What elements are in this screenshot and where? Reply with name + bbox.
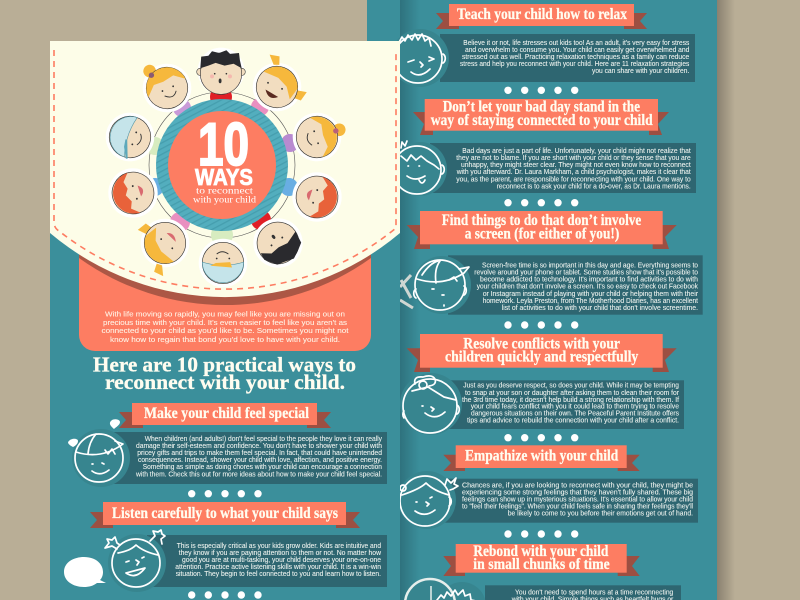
section: screen free: or Instagram instead of playing with your child or helping them with their xyxy=(483,290,699,298)
section: bad day: way of staying connected to your child xyxy=(431,112,653,129)
dots divider xyxy=(188,490,262,497)
section: empathize: Chances are, if you are looking to reconnect with your child, they might be xyxy=(462,481,693,489)
section: resolve conflicts: Just as you deserve respect, so does your child. While it may be tempting xyxy=(463,382,679,390)
section: teach your child how to relax: stress and help you reconnect with your child. Here are 11 relaxation strategies xyxy=(460,60,690,68)
section: resolve conflicts: Resolve conflicts with your xyxy=(463,335,620,352)
badge: 10 ways xyxy=(156,99,288,231)
section: screen free: become addicted to technology. It's important to find activities to do with xyxy=(480,276,698,284)
section: listen carefully xyxy=(90,502,387,587)
panel: intro salmon box xyxy=(79,240,371,351)
dots divider xyxy=(504,321,578,329)
kid: bottom left, yellow pigtail xyxy=(124,206,199,281)
kid: bottom, blue cap xyxy=(199,239,247,287)
heading: practical ways: reconnect with your child. xyxy=(105,370,345,394)
section: bad day: unhappy, they might steer clear. They might not even know how to reconnect xyxy=(461,161,691,169)
illustration: ring of children xyxy=(99,48,353,287)
section: resolve conflicts: tips and advice to rebuild the connection with your child after a conflict. xyxy=(467,417,679,425)
right page shadow xyxy=(717,0,735,600)
section: teach your child how to relax xyxy=(436,4,695,82)
badge: 10 ways: with your child xyxy=(193,195,257,205)
panel: intro salmon box: With life moving so rapidly, you may feel like you are missing out on xyxy=(105,310,345,318)
section: teach your child how to relax: and overwhelm to consume you. Your child can easily get overwhelmed and xyxy=(465,46,689,54)
panel: cream header xyxy=(50,41,400,297)
section: screen free: homework. Leyla Preston, from The Motherhood Diaries, has an excellent xyxy=(483,297,698,305)
section: bad day: with you afterward. Dr. Laura Markham, a child psychologist, makes it clear that xyxy=(456,168,691,176)
section: screen free: Find things to do that don’t involve xyxy=(442,212,641,229)
icon: smiling girl with pigtail xyxy=(398,471,458,529)
icon: girl with top knot xyxy=(400,373,462,435)
panel: right page xyxy=(367,0,717,600)
section: empathize: feelings can show up in mysterious situations. It's essential to allow your child xyxy=(462,495,693,503)
icon: girl with pigtails and speech bubble xyxy=(64,530,166,592)
section: listen carefully: good you are at multi-tasking, your child deserves your one-on-one xyxy=(182,556,381,564)
icon: boy with cap and hearts xyxy=(68,419,130,487)
section: empathize: experiencing some strong feelings that they haven't fully shared. These big xyxy=(462,488,693,496)
section: make your child feel special xyxy=(110,403,387,484)
section: make your child feel special: Something as simple as doing chores with your child can encourage a connection xyxy=(143,463,382,471)
section: make your child feel special: When children (and adults!) don't feel special to the people they love it can really xyxy=(145,435,382,443)
badge: 10 ways: WAYS xyxy=(195,164,253,190)
kid: lower right, red hair xyxy=(286,166,348,228)
panel: intro salmon box: connected to your child as you'd like to be. Sometimes you might not xyxy=(102,326,348,335)
panel: left page xyxy=(50,41,400,600)
section: resolve conflicts: dangerous situations on their own. The Peaceful Parent Institute offers xyxy=(471,410,679,418)
section: resolve conflicts: to snap at your son or daughter after asking them to clean their room for xyxy=(465,389,680,397)
section: screen free: your children that don't involve a screen. It's so easy to check out Facebook xyxy=(477,283,698,291)
heading: practical ways: Here are 10 practical ways to xyxy=(93,353,356,377)
section: bad day: Don’t let your bad day stand in the xyxy=(443,99,640,116)
section: empathize xyxy=(443,445,698,523)
section: empathize: Empathize with your child xyxy=(465,448,619,465)
section: listen carefully: attention. Practice active listening skills with your child. It is a win-win xyxy=(175,563,381,571)
section: screen free xyxy=(407,211,703,315)
icon: boy with cap and pencils xyxy=(400,256,471,314)
badge: 10 ways: 10 xyxy=(198,111,249,178)
section: listen carefully: they know if you are paying attention to them or not. No matter how xyxy=(179,549,382,557)
section: bad day: they are not to blame. If you are short with your child or they sense that you are xyxy=(456,154,691,162)
dots divider xyxy=(504,87,578,94)
icon: winking boy xyxy=(391,29,449,87)
section: resolve conflicts: your child fears conflict with you it could lead to them trying to resolve xyxy=(471,403,679,411)
kid: top left, blonde bun xyxy=(133,52,199,120)
section: bad day: you, as the parent, are responsible for reconnecting with your child. One way to xyxy=(456,175,691,183)
section: screen free: a screen (for either of you!) xyxy=(465,225,619,242)
dots divider xyxy=(504,530,578,538)
section: empathize: to "feel their feelings". When your child feels safe in sharing their feelings they'll xyxy=(462,502,693,510)
section: rebond: in small chunks of time xyxy=(473,556,610,573)
section: resolve conflicts: children quickly and respectfully xyxy=(445,348,639,365)
kid: top, black hair xyxy=(197,48,245,94)
heading: practical ways xyxy=(93,353,356,394)
panel: intro salmon box: precious time with your child. It's even easier to feel like you aren't as xyxy=(103,318,347,327)
section: listen carefully: This is especially critical as your kids grow older. Kids are intuitive and xyxy=(177,542,381,550)
icon: boy with tongue out xyxy=(393,141,447,196)
section: empathize: be likely to come to you before their emotions get out of hand. xyxy=(508,510,693,518)
section: bad day: Bad days are just a part of life. Unfortunately, your child might not realize that xyxy=(462,147,691,155)
section: rebond: Rebond with your child xyxy=(473,543,609,560)
section: make your child feel special: pricey gifts and trips to make them feel special. In fact, that could have unintended xyxy=(137,449,382,457)
section: teach your child how to relax: Teach your child how to relax xyxy=(457,6,627,23)
dots divider xyxy=(504,434,578,441)
kid: top right, blonde pigtail xyxy=(246,51,315,120)
section: make your child feel special: damage their self-esteem and confidence. You don't have to shower your child with xyxy=(136,442,382,450)
section: make your child feel special: Make your child feel special xyxy=(144,405,310,422)
section: teach your child how to relax: stressed out as well. Practicing relaxation techniques as a family can reduce xyxy=(462,53,689,61)
section: make your child feel special: with them. Check this out for more ideas about how to make your child feel special. xyxy=(135,470,382,478)
section: listen carefully: Listen carefully to what your child says xyxy=(112,505,338,522)
arms and bodies xyxy=(146,86,299,246)
section: make your child feel special: consequences. Instead, shower your child with love, affection, and positive energy. xyxy=(138,456,382,464)
kid: lower left, red hair xyxy=(102,162,164,224)
section: resolve conflicts xyxy=(407,334,684,429)
kid: bottom right, black hair xyxy=(243,208,313,278)
section: rebond xyxy=(443,543,681,600)
section: teach your child how to relax: you can share with your children. xyxy=(592,67,689,75)
panel: intro salmon box: know how to regain that bond you'd love to have with your child. xyxy=(110,335,340,344)
section: resolve conflicts: the 3rd time today, it doesn't help build a strong relationship with them. If xyxy=(462,396,679,404)
section: screen free: list of activities to do with your child that don't involve screentime. xyxy=(502,304,698,312)
section: bad day: reconnect is to ask your child for a do-over, as Dr. Laura mentions. xyxy=(497,182,691,190)
section: rebond: You don't need to spend hours at a time reconnecting xyxy=(515,588,673,596)
section: teach your child how to relax: Believe it or not, life stresses out kids too! As an adult, it's very easy for stress xyxy=(463,39,690,47)
dots divider xyxy=(188,591,262,599)
section: listen carefully: situation. They begin to feel connected to you and learn how to listen. xyxy=(176,570,381,578)
dots divider xyxy=(504,199,578,206)
section: screen free: Screen-free time is so important in this day and age. Everything seems to xyxy=(482,262,698,270)
section: screen free: revolve around your phone or tablet. Some studies show that it's possible to xyxy=(474,269,698,277)
kid: upper left, blue cap xyxy=(99,106,161,168)
section: bad day xyxy=(413,99,696,193)
kid: right, blonde bun xyxy=(286,105,353,168)
badge: 10 ways: to reconnect xyxy=(196,186,254,196)
icon: clock and spiky boy xyxy=(405,579,486,600)
